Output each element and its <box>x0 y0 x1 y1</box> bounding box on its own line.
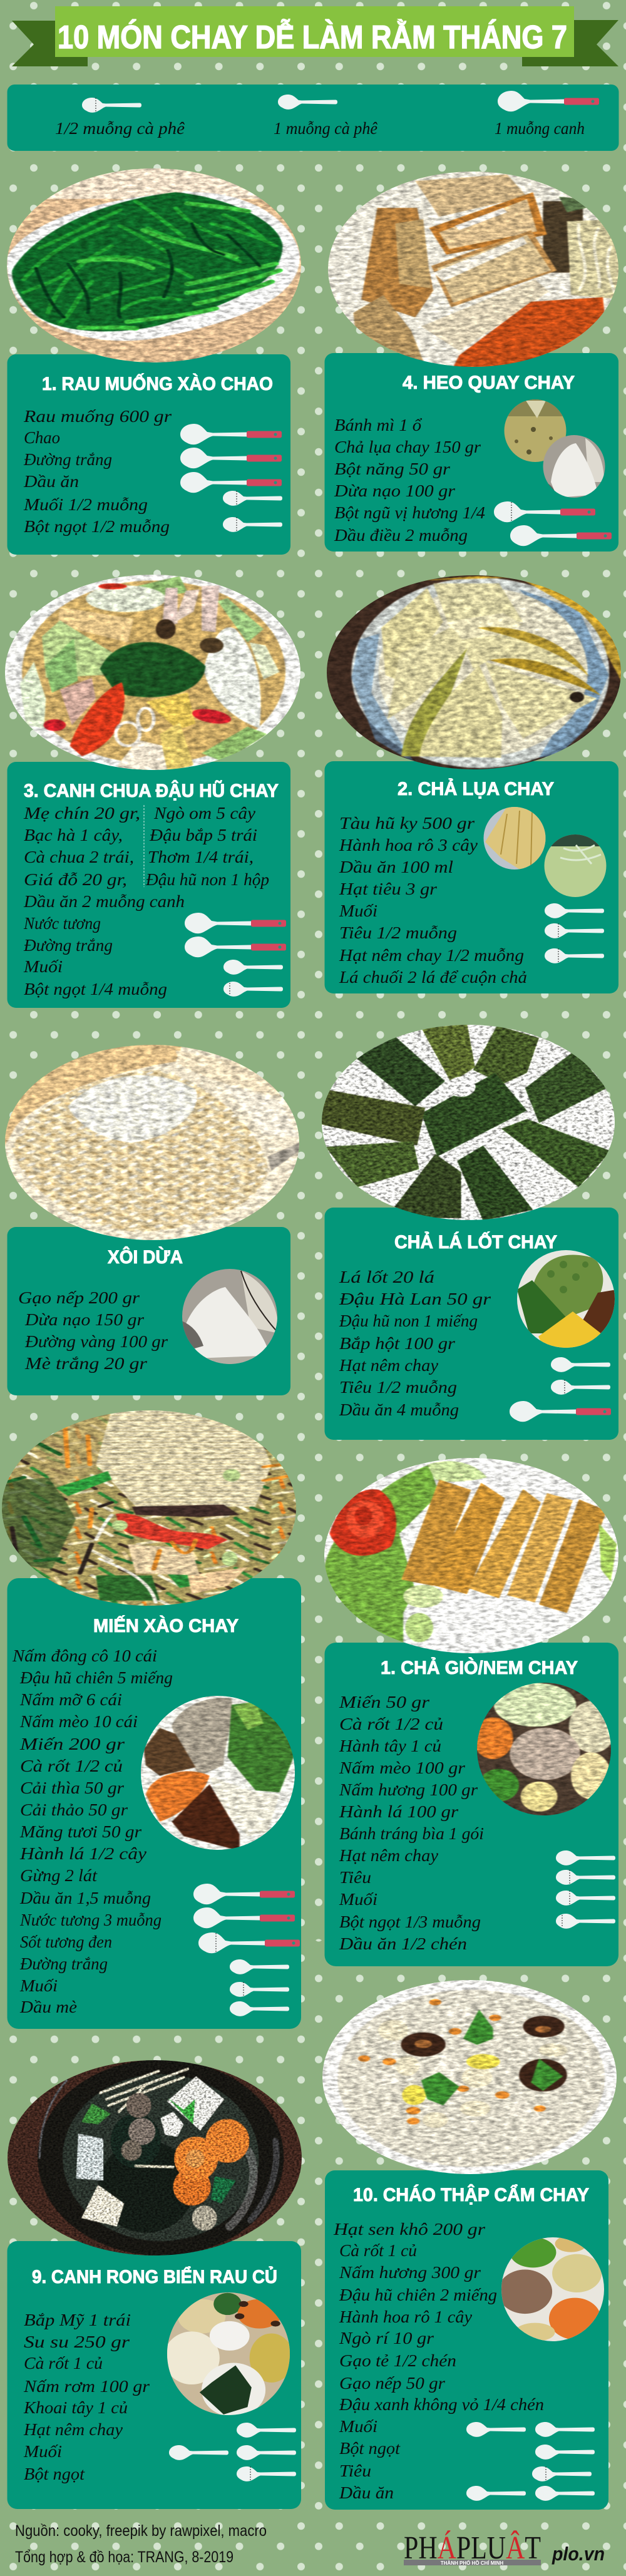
ingredient list: Muối 1/2 muỗng <box>23 495 148 514</box>
ingredient list: Giá đỗ 20 gr, <box>24 870 127 889</box>
ingredient list: Tiêu <box>339 1868 371 1887</box>
ingredient list: Bột ngọt <box>24 2465 86 2483</box>
ingredient list: Nước tương <box>23 914 101 933</box>
ingredient list: Tàu hũ ky 500 gr <box>339 814 475 833</box>
legend: one teaspoon <box>274 95 377 138</box>
ingredient list: Gạo nếp 50 gr <box>339 2374 446 2393</box>
logo: Pháp Luật plo.vn: plo.vn <box>552 2543 605 2565</box>
legend: half teaspoon: 1/2 muỗng cà phê <box>55 119 185 138</box>
heading: 2. CHẢ LỤA CHAY <box>398 778 554 799</box>
ingredient list: Dầu ăn <box>339 2483 394 2502</box>
heading: 9. CANH RONG BIỂN RAU CỦ <box>32 2266 277 2287</box>
ingredient list: Dầu ăn 1/2 chén <box>339 1934 467 1953</box>
ingredient list: Đậu bắp 5 trái <box>149 826 257 844</box>
ingredient list: Đậu hũ chiên 5 miếng <box>19 1668 173 1687</box>
ingredient list: Sốt tương đen <box>20 1932 112 1951</box>
ingredient list: Đậu hũ non 1 hộp <box>145 870 269 889</box>
ingredient list: Bạc hà 1 cây, <box>24 826 123 844</box>
ingredient list: Măng tươi 50 gr <box>19 1822 142 1841</box>
ingredient list: Tiêu 1/2 muỗng <box>339 923 457 942</box>
ingredient list: Tiêu 1/2 muỗng <box>339 1378 457 1397</box>
ingredient list: Cải thìa 50 gr <box>20 1778 125 1797</box>
ingredient list: Nấm hương 100 gr <box>339 1780 478 1799</box>
thumbnail: dừa nạo <box>182 1268 279 1371</box>
thumbnail: nguyên liệu miến <box>136 1692 304 1853</box>
ingredient list: Miến 200 gr <box>19 1735 125 1753</box>
ingredient list: Muối <box>339 1890 377 1909</box>
spoon icons <box>193 1884 300 2016</box>
ingredient list <box>23 407 172 536</box>
ingredient list: Khoai tây 1 củ <box>23 2398 128 2417</box>
heading: 4. HEO QUAY CHAY <box>403 372 575 393</box>
heading: 3. CANH CHUA ĐẬU HŨ CHAY <box>24 780 279 801</box>
heading: MIẾN XÀO CHAY <box>93 1615 239 1636</box>
ingredient list <box>339 1693 484 1953</box>
photo: rau muống <box>7 168 301 362</box>
ingredient list: Bột ngũ vị hương 1/4 <box>334 503 485 522</box>
ingredient list: Ngò om 5 cây <box>153 804 255 823</box>
ingredient list: Bột ngọt 1/4 muỗng <box>24 980 167 998</box>
footer credits: Nguồn: cooky, freepik by rawpixel, macro <box>15 2522 267 2540</box>
ingredient list: Hành hoa rô 3 cây <box>339 836 478 854</box>
ingredient list: Dầu điều 2 muỗng <box>334 526 468 545</box>
ingredient list: Bắp hột 100 gr <box>339 1334 456 1353</box>
panel: rau muống xào chao <box>8 354 290 555</box>
ingredient list: Bột ngọt 1/3 muỗng <box>339 1912 481 1931</box>
spoon icons <box>510 1357 611 1422</box>
ingredient list <box>333 2220 544 2502</box>
thumbnail: nguyên liệu cháo <box>498 2235 607 2343</box>
logo: Pháp Luật plo.vn <box>404 2530 605 2566</box>
thumbnail: bột năng <box>543 435 605 498</box>
ingredient list: Hạt nêm chay <box>23 2420 123 2439</box>
ingredient list: Cải thảo 50 gr <box>20 1800 128 1819</box>
spoon icons <box>185 913 286 997</box>
ingredient list: Hạt sen khô 200 gr <box>333 2220 486 2239</box>
ingredient list: Rau muống 600 gr <box>23 407 172 426</box>
ingredient list: Bột ngọt <box>339 2439 401 2458</box>
spoon icons <box>466 2422 595 2501</box>
panel: canh chua đậu hũ chay <box>8 762 290 1008</box>
legend: one tablespoon <box>495 91 599 138</box>
ingredient list: Gạo tẻ 1/2 chén <box>339 2351 456 2370</box>
ingredient list: Hạt nêm chay <box>339 1356 438 1375</box>
ingredient list: Dầu ăn 100 ml <box>339 858 453 876</box>
title banner <box>12 6 618 66</box>
ingredient list: Bột ngọt 1/2 muỗng <box>24 517 170 536</box>
ingredient list <box>12 1646 173 2016</box>
ingredient list: Bánh mì 1 ổ <box>334 416 423 434</box>
ingredient list: Đậu hũ non 1 miếng <box>339 1311 478 1330</box>
ingredient list: Bánh tráng bìa 1 gói <box>339 1824 484 1843</box>
panel: xôi dừa <box>8 1227 290 1395</box>
photo: chả lá lốt <box>316 1022 623 1224</box>
ingredient list: Muối <box>19 1976 58 1995</box>
ingredient list <box>339 814 527 987</box>
ingredient list: Đậu hũ chiên 2 miếng <box>339 2286 497 2304</box>
ingredient list: Nấm mèo 10 cái <box>19 1712 138 1731</box>
ingredient list: Đường vàng 100 gr <box>24 1332 168 1351</box>
ingredient list: Thơm 1/4 trái, <box>148 848 254 866</box>
thumbnail: nguyên liệu canh <box>163 2291 294 2418</box>
photo: heo quay <box>328 172 618 367</box>
thumbnail: hành hoa <box>545 834 606 897</box>
ingredient list: Đậu xanh không vỏ 1/4 chén <box>339 2395 544 2414</box>
panel: spoon legend <box>8 85 618 151</box>
ingredient list: Su su 250 gr <box>24 2332 130 2351</box>
photo: chả lụa <box>319 572 626 772</box>
logo: Pháp Luật plo.vn: THÀNH PHỐ HỒ CHÍ MINH <box>441 2560 503 2566</box>
ingredient list: Dừa nạo 150 gr <box>24 1310 145 1329</box>
ingredient list <box>339 1268 491 1419</box>
panel: heo quay chay <box>324 353 618 552</box>
ingredient list: Gạo nếp 200 gr <box>18 1288 140 1307</box>
ingredient list: Dầu mè <box>19 1998 77 2016</box>
ingredient list: Lá chuối 2 lá để cuộn chả <box>339 968 527 987</box>
photo: xôi dừa <box>0 1042 311 1243</box>
legend: half teaspoon <box>55 98 185 138</box>
ingredient list <box>334 416 485 545</box>
ingredient list: Nước tương 3 muỗng <box>19 1911 162 1929</box>
ingredient list: Cà rốt 1/2 củ <box>20 1757 123 1775</box>
ingredient list: Hành lá 100 gr <box>339 1802 459 1821</box>
ingredient list: Hành lá 1/2 cây <box>19 1844 146 1863</box>
ingredient list: Gừng 2 lát <box>20 1866 98 1885</box>
photo: canh chua <box>0 572 311 772</box>
ingredient list: Nấm đông cô 10 cái <box>12 1646 157 1665</box>
ingredient list: Đường trắng <box>23 936 113 955</box>
ingredient list: Hành hoa rô 1 cây <box>339 2307 472 2326</box>
heading: 1. CHẢ GIÒ/NEM CHAY <box>381 1657 578 1678</box>
legend: one tablespoon: 1 muỗng canh <box>495 119 585 138</box>
ingredient list: Cà rốt 1/2 củ <box>339 1715 443 1733</box>
heading: XÔI DỪA <box>108 1246 183 1268</box>
ingredient list: Lá lốt 20 lá <box>339 1268 434 1286</box>
ingredient list: Hạt tiêu 3 gr <box>339 880 438 898</box>
footer credits: Tổng hợp & đồ họa: TRANG, 8-2019 <box>15 2548 233 2566</box>
ingredient list: Hạt nêm chay 1/2 muỗng <box>339 946 524 965</box>
spoon icons <box>545 903 604 963</box>
spoon icons <box>556 1850 615 1929</box>
photo: cháo thập cẩm <box>316 1978 623 2178</box>
thumbnail: tàu hũ ky <box>483 807 546 870</box>
spoon icons <box>169 2423 296 2481</box>
ingredient list: Mè trắng 20 gr <box>24 1354 148 1373</box>
ingredient list: Bắp Mỹ 1 trái <box>24 2311 131 2329</box>
photo: miến xào <box>0 1407 311 1607</box>
ingredient list: Dầu ăn 4 muỗng <box>339 1400 459 1419</box>
logo: Pháp Luật plo.vn: PHÁPLUẬT <box>404 2530 541 2566</box>
panel: chả lá lốt chay <box>324 1208 618 1440</box>
ingredient list <box>18 1288 168 1373</box>
legend: one teaspoon: 1 muỗng cà phê <box>274 119 377 138</box>
thumbnail: chả lụa <box>505 399 566 462</box>
ingredient list: Nấm mèo 100 gr <box>339 1758 466 1777</box>
ingredient list: Bột năng 50 gr <box>334 459 451 478</box>
photo: chả giò <box>319 1457 626 1657</box>
panel: miến xào chay <box>8 1578 304 2029</box>
ingredient list: Muối <box>339 2417 377 2436</box>
panel: cháo thập cẩm chay <box>325 2170 608 2510</box>
ingredient list: Miến 50 gr <box>339 1693 430 1711</box>
thumbnail: nguyên liệu lá lốt <box>516 1249 617 1349</box>
ingredient list: Đường trắng <box>19 1954 108 1973</box>
panel: chả lụa chay <box>324 761 618 993</box>
ingredient list: Chả lụa chay 150 gr <box>334 438 481 456</box>
spoon icons <box>494 501 612 546</box>
photo: canh rong biển <box>0 2053 313 2266</box>
ingredient list: Mẹ chín 20 gr, <box>23 804 140 823</box>
panel: canh rong biển rau củ <box>8 2241 301 2509</box>
heading: CHẢ LÁ LỐT CHAY <box>394 1231 557 1253</box>
ingredient list: Hành tây 1 củ <box>339 1737 441 1755</box>
ingredient list: Ngò rí 10 gr <box>339 2329 434 2348</box>
ingredient list: Nấm hương 300 gr <box>339 2263 481 2282</box>
ingredient list: Cà rốt 1 củ <box>339 2241 417 2260</box>
ingredient list: Đậu Hà Lan 50 gr <box>339 1290 491 1308</box>
ingredient list: Hạt nêm chay <box>339 1846 438 1865</box>
ingredient list: Dầu ăn <box>23 472 79 491</box>
spoon icons <box>180 424 282 532</box>
ingredient list: Dầu ăn 1,5 muỗng <box>19 1889 151 1907</box>
footer credits <box>15 2522 267 2566</box>
thumbnail: nguyên liệu chả giò <box>473 1682 617 1817</box>
panel: chả giò / nem chay <box>324 1643 618 1966</box>
heading: 1. RAU MUỐNG XÀO CHAO <box>42 373 273 394</box>
ingredient list: Dầu ăn 2 muỗng canh <box>23 892 185 911</box>
ingredient list: Cà rốt 1 củ <box>24 2354 103 2373</box>
heading: 10. CHÁO THẬP CẨM CHAY <box>353 2184 589 2205</box>
ingredient list: Chao <box>24 428 60 447</box>
ingredient list: Cà chua 2 trái, <box>24 848 134 866</box>
ingredient list: Muối <box>339 901 377 920</box>
ingredient list: Muối <box>23 957 63 976</box>
ingredient list: Muối <box>23 2442 62 2461</box>
ingredient list: Tiêu <box>339 2461 371 2480</box>
ingredient list: Nấm mỡ 6 cái <box>19 1690 122 1709</box>
ingredient list <box>23 2311 150 2483</box>
ingredient list: Nấm rơm 100 gr <box>23 2377 150 2396</box>
ingredient list: Đường trắng <box>23 450 112 469</box>
ingredient list: Dừa nạo 100 gr <box>334 481 456 500</box>
ingredient list <box>23 804 269 998</box>
